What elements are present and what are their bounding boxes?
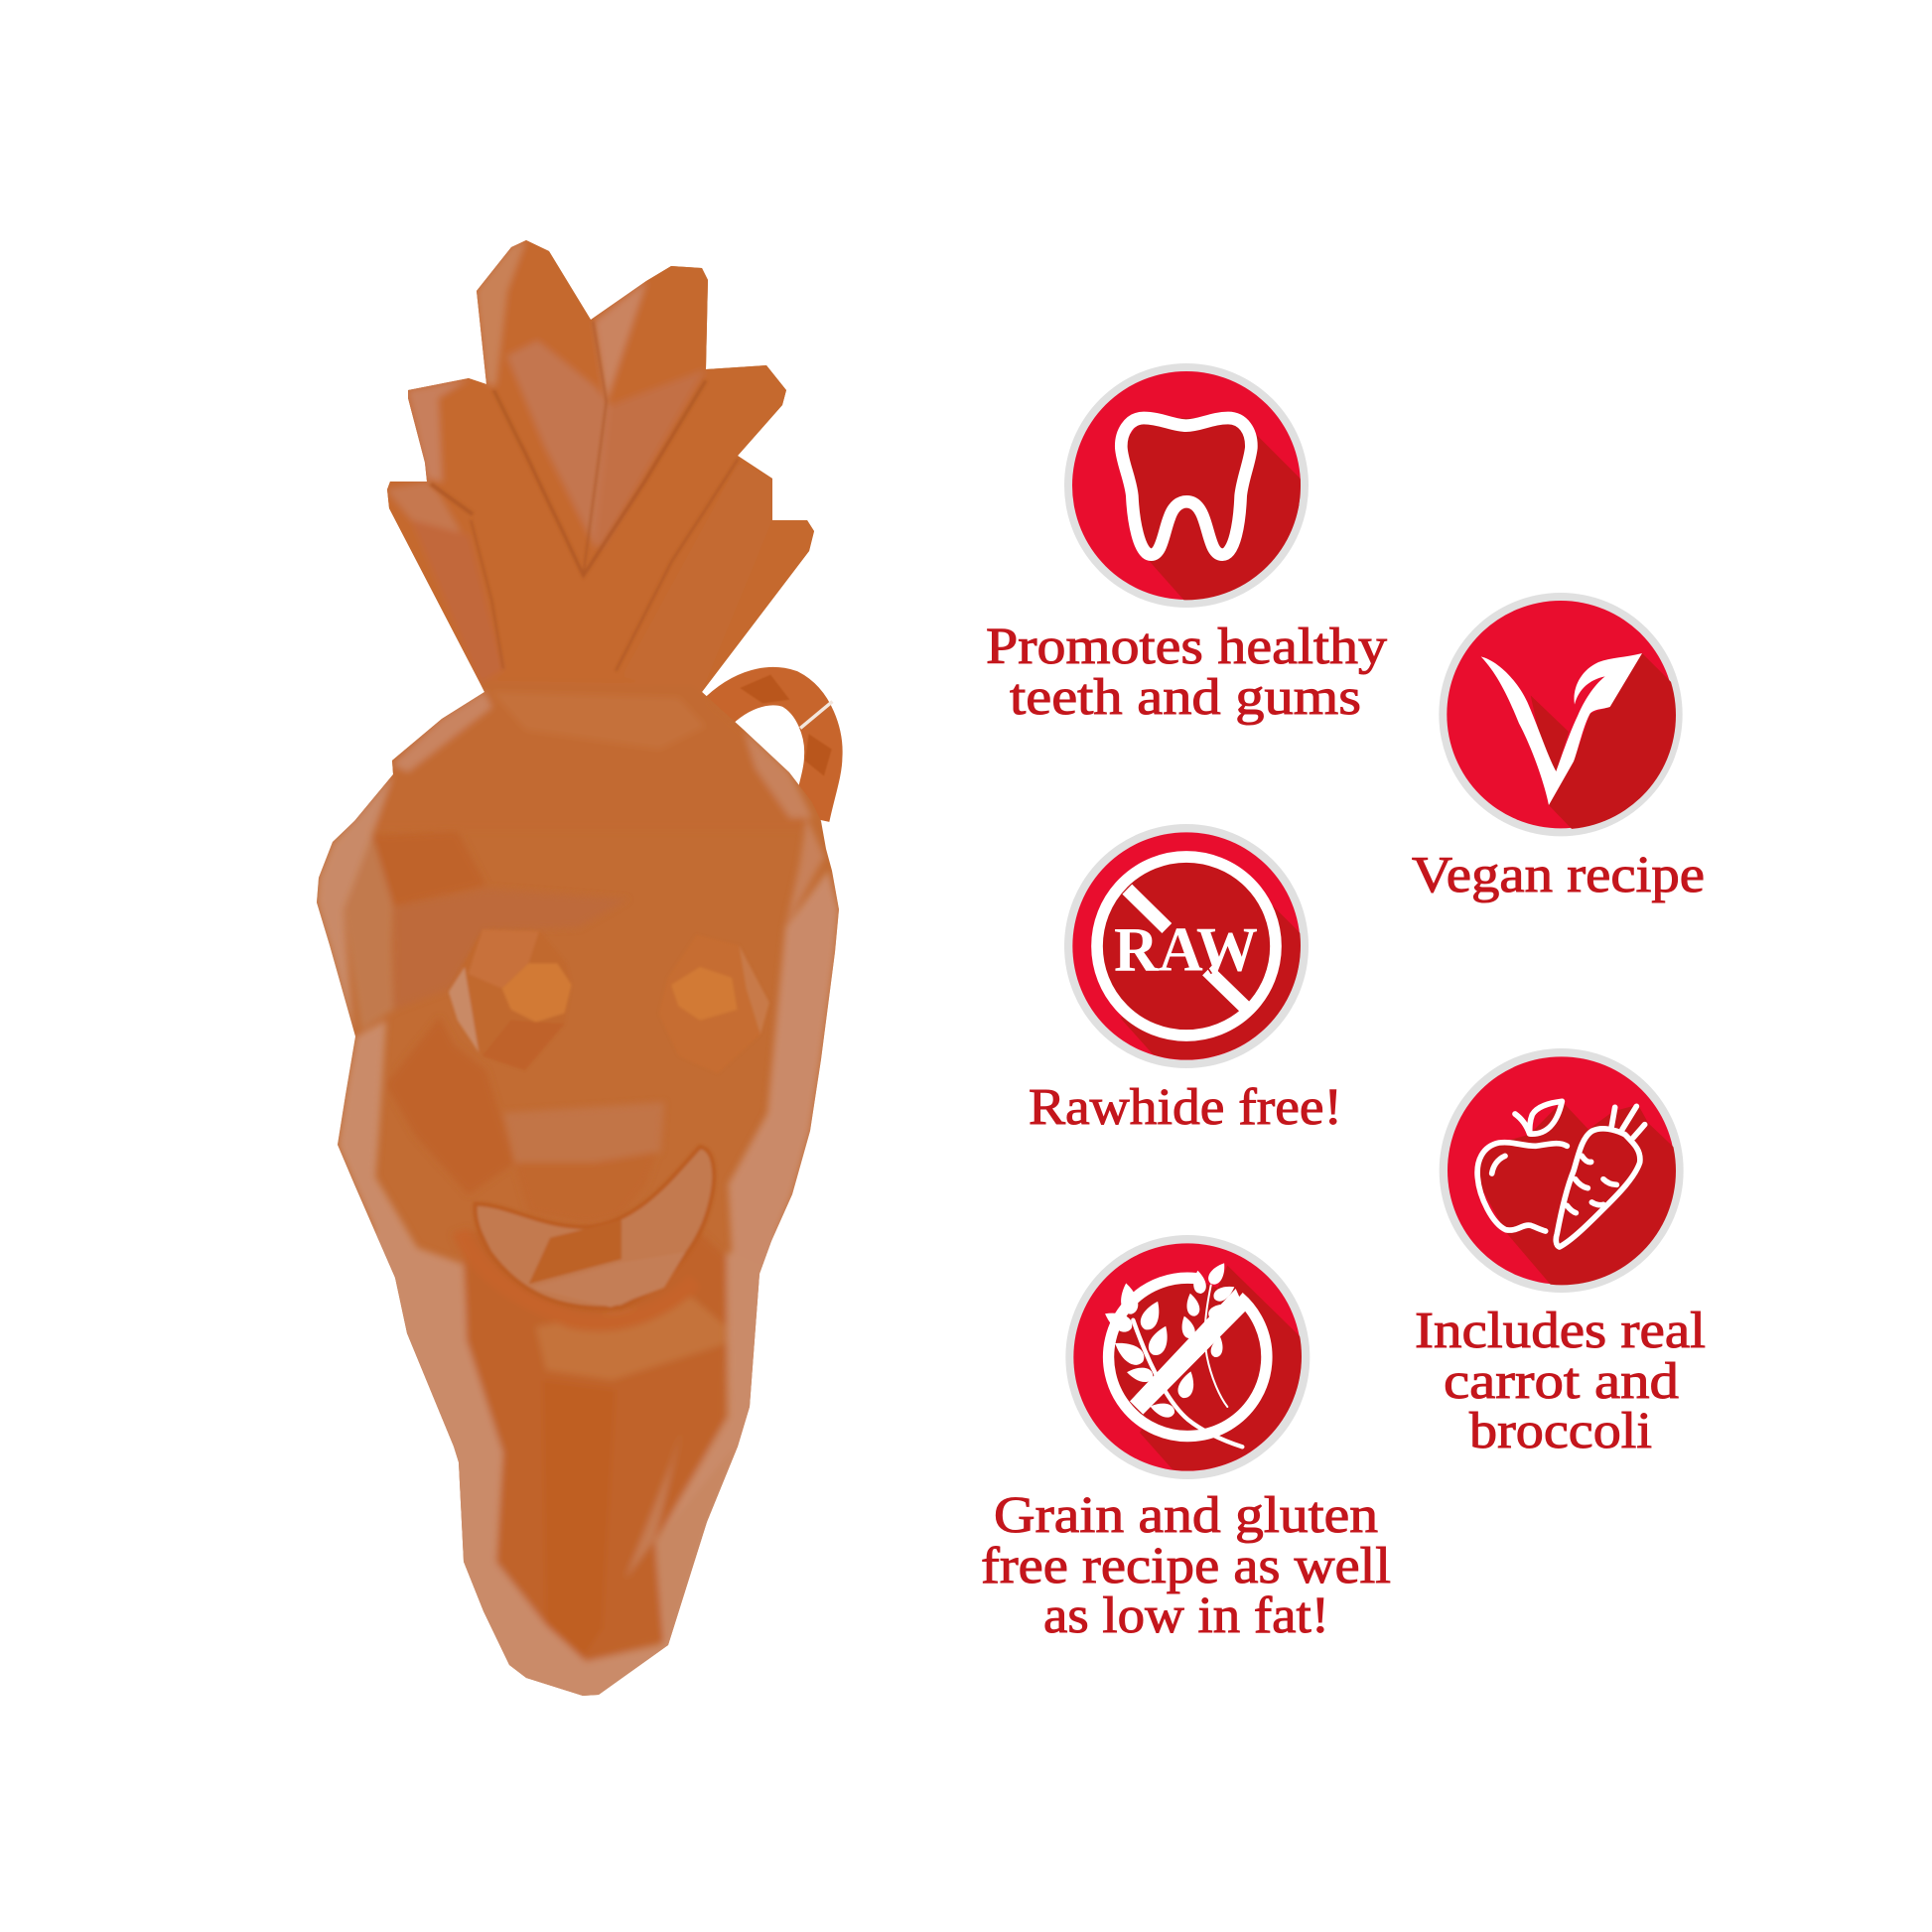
panel: real carrot and broccoli [1415,1048,1706,1459]
label: includes real carrot and broccoli: carrot and [1444,1353,1679,1410]
label: includes real carrot and broccoli: Includes real [1415,1303,1706,1359]
label: grain and gluten free, low in fat: Grain and gluten [994,1487,1378,1544]
panel: healthy teeth [986,363,1387,726]
panel: rawhide free [1029,824,1342,1136]
panel: grain and gluten free [981,1235,1391,1644]
leaf creases [431,322,738,671]
panel: vegan recipe [1412,593,1705,903]
carrot [1556,1129,1640,1247]
label: promotes healthy teeth and gums [986,619,1387,726]
right eye [671,949,768,1033]
lower body and tip [370,1231,777,1727]
icon: vegan V with leaf [1439,593,1683,836]
leaves and crown [316,233,832,829]
label: grain and gluten free, low in fat: as low in fat! [1043,1587,1329,1644]
icon: no rawhide [1064,824,1309,1068]
apple [1477,1143,1567,1231]
head and cheeks [317,776,839,1253]
label: rawhide free: Rawhide free! [1029,1079,1342,1136]
icon: no rawhide: RAW [1114,914,1258,984]
label: vegan recipe: Vegan recipe [1412,847,1705,903]
label: promotes healthy teeth and gums: teeth and gums [1010,669,1361,726]
product photo: smiling carrot chew [298,228,864,1727]
label: includes real carrot and broccoli: broccoli [1469,1403,1652,1459]
label: grain and gluten free, low in fat [981,1487,1391,1644]
label: includes real carrot and broccoli [1415,1303,1706,1459]
smiling mouth [475,1147,714,1309]
label: promotes healthy teeth and gums: Promotes healthy [986,619,1387,675]
icon: tooth [1064,363,1309,608]
left eye [449,929,572,1070]
infographic canvas [317,240,1706,1696]
icon: no grain [1065,1235,1310,1479]
icon: apple and carrot [1440,1048,1684,1293]
carrot ring loop [710,675,832,818]
label: grain and gluten free, low in fat: free recipe as well [981,1538,1391,1594]
carrot body with leaves [317,240,839,1696]
